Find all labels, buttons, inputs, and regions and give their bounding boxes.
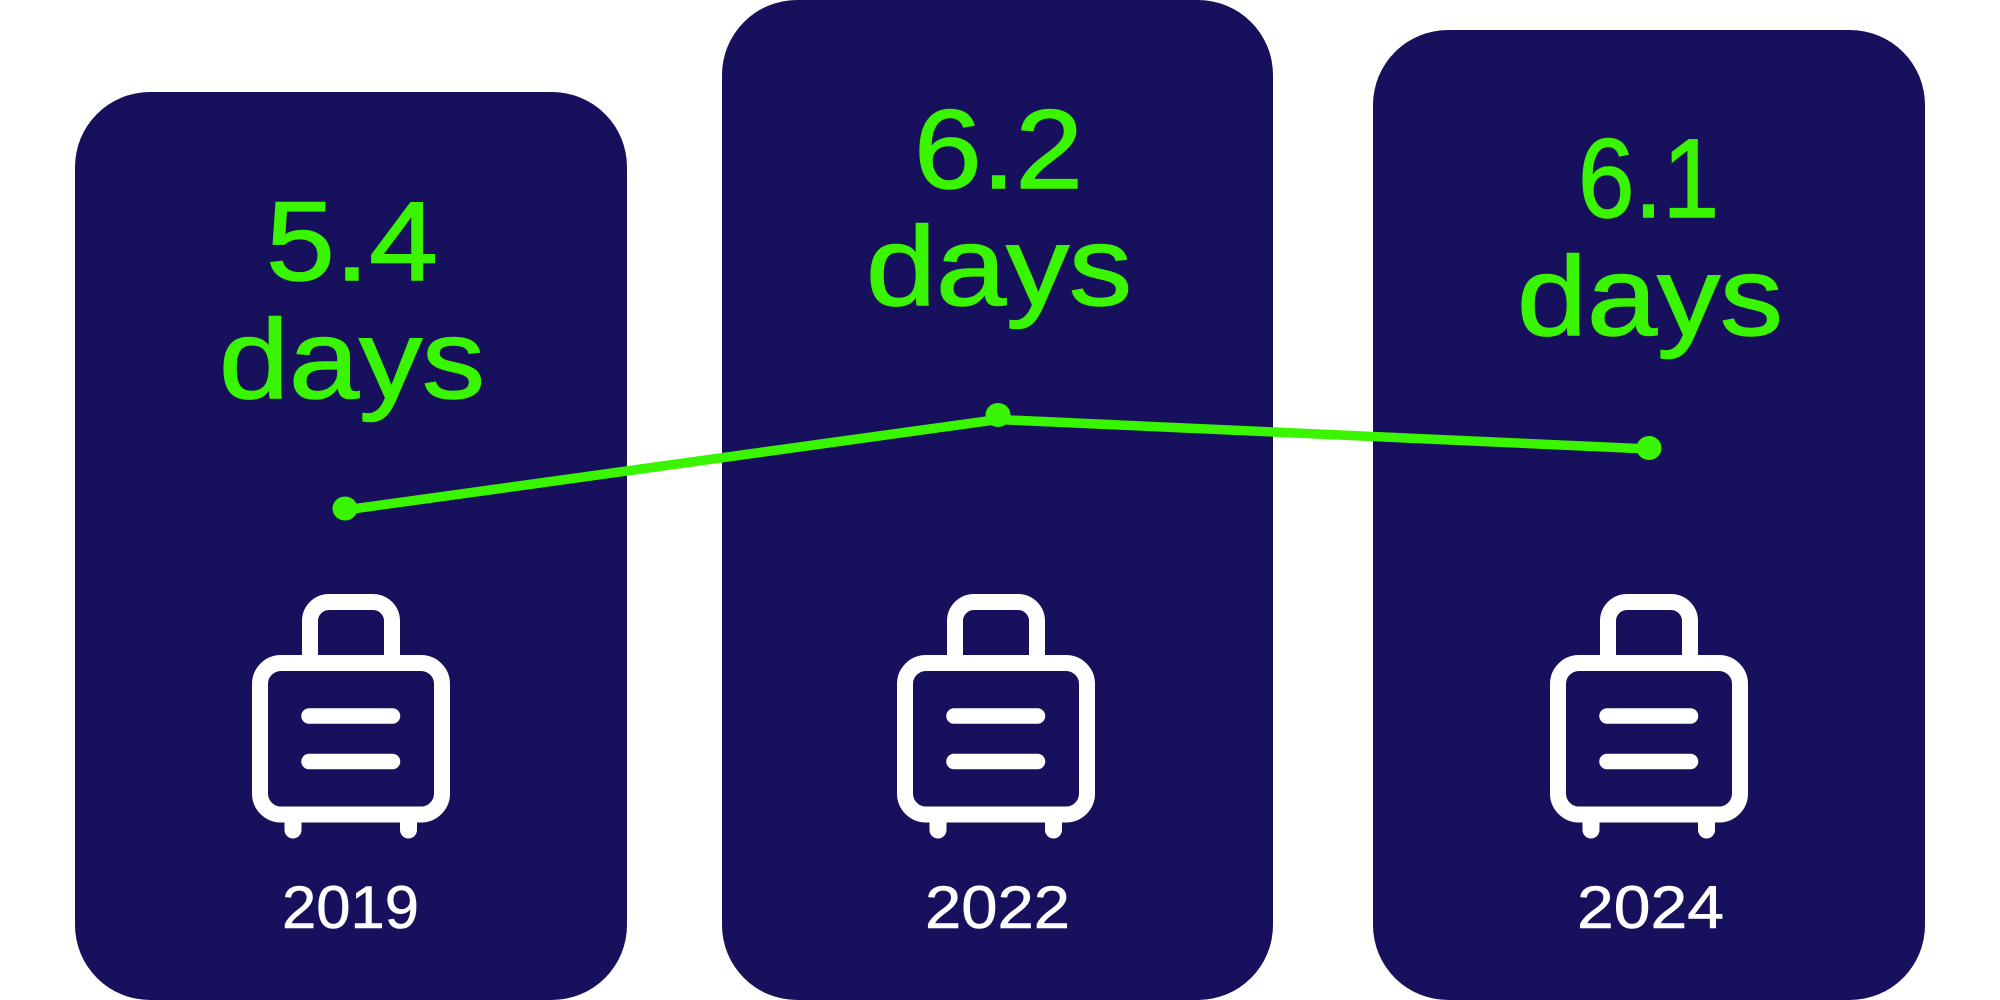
icon: suitcase 2022	[905, 602, 1087, 830]
unit days: days	[866, 204, 1132, 329]
value 6.2: 6.2	[914, 87, 1083, 212]
year 2022: 2022	[925, 874, 1070, 941]
panel: 2024	[1373, 30, 1925, 1000]
card background 2024	[1373, 30, 1925, 1000]
card background 2022	[722, 0, 1273, 1000]
line chart: days by year	[332, 403, 1662, 520]
icon: suitcase 2019	[260, 602, 442, 830]
panel: 2019	[75, 92, 627, 1000]
trend line	[345, 420, 1649, 510]
unit days: days	[1517, 234, 1783, 359]
data point 2022	[986, 403, 1010, 427]
year 2024: 2024	[1577, 874, 1724, 941]
icon: suitcase 2024	[1558, 602, 1740, 830]
panel: 2022	[722, 0, 1273, 1000]
year 2019: 2019	[282, 874, 419, 941]
value 6.1: 6.1	[1578, 116, 1719, 241]
unit days: days	[219, 297, 485, 422]
data point 2024	[1636, 436, 1662, 460]
data point 2019	[332, 496, 358, 520]
value 5.4: 5.4	[266, 179, 438, 304]
card background 2019	[75, 92, 627, 1000]
